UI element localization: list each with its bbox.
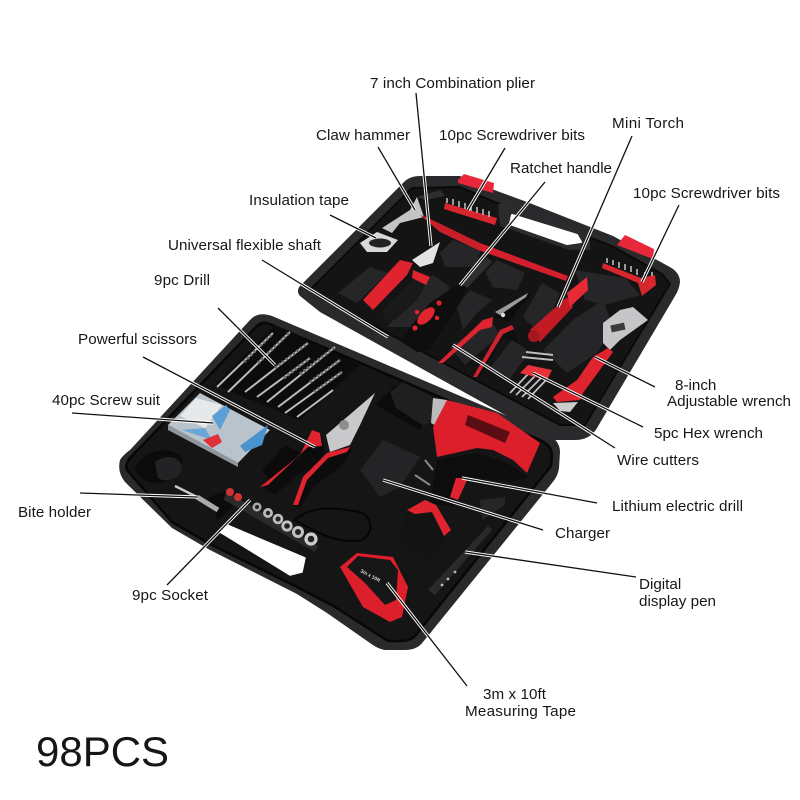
tool: adjustable wrench — [553, 307, 648, 412]
label: 10pc Screwdriver bits right: 10pc Screwdriver bits — [633, 185, 780, 202]
label: 40pc Screw suit: 40pc Screw suit — [52, 392, 161, 409]
leader: 9pc socket — [167, 500, 250, 585]
label: Charger: Charger — [555, 525, 610, 542]
label: 3m x 10ft Measuring Tape: Measuring Tape — [465, 703, 576, 720]
leader: claw hammer — [378, 147, 415, 210]
leader: 9pc drill — [218, 308, 275, 365]
tool: round holder recess — [135, 450, 182, 483]
red latch right — [617, 235, 654, 259]
label: 9pc Drill: 9pc Drill — [154, 272, 210, 289]
leader: insulation tape — [330, 215, 376, 238]
label: Mini Torch: Mini Torch — [612, 115, 684, 132]
red latch left — [458, 174, 494, 193]
tool: mini torch — [528, 277, 588, 342]
leader: lithium electric drill — [462, 478, 597, 503]
leader: 40pc screw suit — [72, 413, 213, 423]
leader: bite holder — [80, 493, 197, 497]
bottom case: main tray — [119, 314, 560, 650]
leader: ratchet handle — [460, 182, 545, 285]
tool: ratchet handle — [402, 257, 492, 352]
tool: bite holder — [175, 486, 218, 510]
tool: charger — [295, 440, 433, 541]
label: Wire cutters: Wire cutters — [617, 452, 699, 469]
leader: powerful scissors — [143, 357, 315, 447]
label: Digital display pen: display pen — [639, 593, 716, 610]
label: Lithium electric drill: Lithium electric drill — [612, 498, 743, 515]
leader: 5pc hex wrench — [533, 373, 643, 427]
tool: insulation tape — [360, 232, 398, 252]
lid handle cut-out — [510, 215, 581, 244]
label: Bite holder: Bite holder — [18, 504, 91, 521]
tool: digital display pen — [428, 497, 505, 595]
leader: 7 inch Combination plier — [416, 93, 431, 246]
tool: hex wrench — [510, 352, 553, 399]
tool: measuring tape — [340, 553, 408, 622]
tray recess shapes — [208, 385, 432, 520]
label: 7 inch Combination plier: 7 inch Combination plier — [370, 75, 535, 92]
leader: adjustable wrench — [595, 357, 655, 387]
label: Universal flexible shaft: Universal flexible shaft — [168, 237, 322, 254]
top case: open lid — [298, 174, 680, 440]
tool: screw suit box — [168, 393, 270, 467]
tool: lithium electric drill — [390, 382, 540, 560]
tool: powerful scissors — [260, 393, 375, 508]
label: Powerful scissors: Powerful scissors — [78, 331, 197, 348]
tool: screwdriver bit strip 2 — [602, 258, 656, 296]
label: 5pc Hex wrench: 5pc Hex wrench — [654, 425, 763, 442]
tool: socket set — [224, 488, 318, 552]
label: 3m x 10ft Measuring Tape: 3m x 10ft — [483, 686, 547, 703]
leader: mini torch — [558, 136, 632, 307]
label: 8-inch Adjustable wrench: Adjustable wrench — [667, 393, 791, 410]
tool: wire cutters — [438, 292, 533, 377]
tool: claw hammer — [382, 190, 568, 281]
tool: combination plier — [363, 242, 440, 320]
heading: 98PCS: 98PCS — [36, 728, 169, 775]
leader: universal flexible shaft — [262, 260, 388, 337]
label: Digital display pen: Digital — [639, 576, 681, 593]
label: 10pc Screwdriver bits upper: 10pc Screwdriver bits — [439, 127, 585, 144]
label: 8-inch Adjustable wrench: 8-inch — [675, 377, 716, 394]
label: Insulation tape: Insulation tape — [249, 192, 349, 209]
leader: measuring tape — [387, 583, 467, 686]
label: Claw hammer: Claw hammer — [316, 127, 410, 144]
foam blocks — [338, 240, 640, 378]
lid handle surround — [498, 200, 590, 250]
leader: wire cutters — [453, 345, 615, 448]
leader: 10pc screwdriver bits right — [642, 205, 679, 282]
handle cut-out — [220, 525, 305, 575]
leader: digital display pen — [465, 552, 636, 577]
tool: measuring tape: 3m x 10ft — [359, 568, 381, 584]
label: 9pc Socket: 9pc Socket — [132, 587, 209, 604]
leader: 10pc screwdriver bits upper — [468, 148, 505, 210]
leader: charger — [383, 480, 543, 530]
label: Ratchet handle: Ratchet handle — [510, 160, 612, 177]
tool: screwdriver bit strip 1 — [444, 198, 497, 225]
drill-bit compartment — [215, 325, 360, 420]
